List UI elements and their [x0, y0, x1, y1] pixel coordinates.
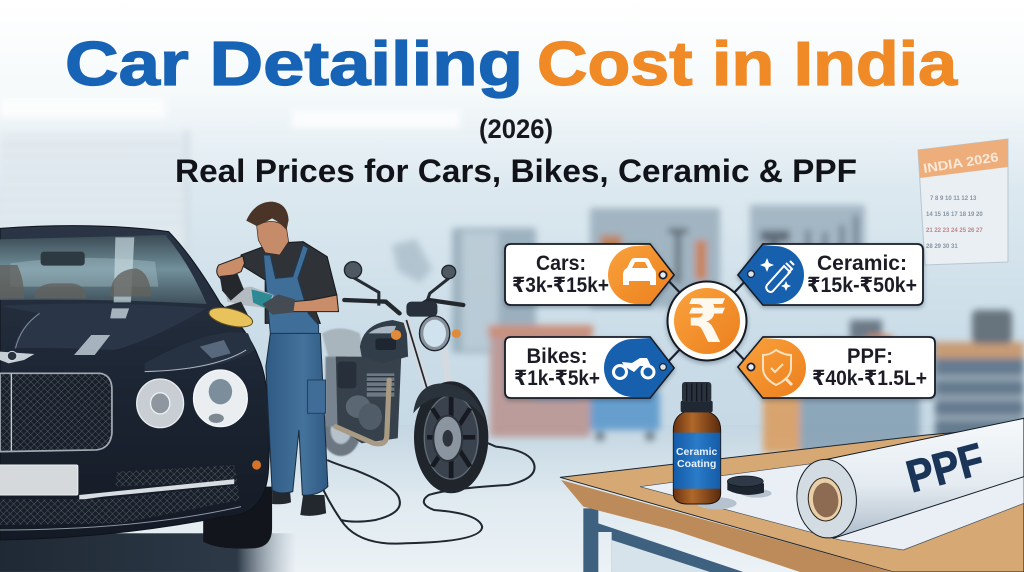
icon: shield: [763, 350, 792, 385]
protective film sheet: [640, 453, 1024, 550]
price tag: ceramic: Ceramic:: [817, 252, 907, 275]
car: [0, 226, 296, 572]
shirt: [241, 242, 337, 323]
license plate: [0, 465, 78, 495]
title: [65, 30, 958, 99]
title: Cost in India: [537, 30, 958, 99]
price tag: ppf: [738, 337, 935, 398]
ceramic coating bottle: Coating: [677, 459, 716, 470]
head: [257, 222, 289, 255]
wall calendar: INDIA 2026: [922, 149, 1000, 176]
icon: motorcycle: [614, 358, 654, 378]
wall calendar: 7 8 9 10 11 12 13: [930, 196, 977, 202]
overall bib and straps: [263, 245, 319, 333]
icon: car: [623, 258, 656, 285]
subtitle: Real Prices for Cars, Bikes, Ceramic & PPF: [175, 153, 857, 189]
rupee medallion: ₹: [686, 288, 728, 355]
power cable: [286, 317, 535, 544]
price tag: bikes: Bikes:: [526, 345, 588, 368]
film roll: [794, 418, 1024, 540]
overalls: [266, 333, 328, 495]
ceramic coating bottle: [673, 382, 721, 504]
gloves: [220, 274, 244, 301]
price tag: bikes: [505, 337, 674, 398]
price tag: cars: Cars:: [536, 252, 586, 275]
boots: [272, 491, 326, 516]
price tag: ceramic: [738, 244, 923, 305]
price tag: cars: ₹3k-₹15k+: [512, 274, 609, 297]
motorcycle: [321, 262, 488, 493]
polisher: [226, 287, 274, 308]
price tag: ppf: ₹40k-₹1.5L+: [812, 367, 927, 390]
ceramic coating bottle: Ceramic: [676, 447, 718, 458]
price tag: ppf: PPF:: [847, 345, 893, 368]
wall calendar: 28 29 30 31: [926, 244, 958, 250]
lower grille: [115, 465, 238, 487]
front grille: [0, 373, 112, 452]
work table: [560, 382, 1024, 572]
detailer with polisher: [207, 202, 339, 516]
wall calendar: [918, 139, 1008, 265]
rupee medallion: [668, 282, 746, 360]
front wheel: [203, 487, 272, 549]
icon: spray bottle: [760, 258, 794, 292]
table top: [560, 427, 1024, 572]
price tag: ceramic: ₹15k-₹50k+: [807, 274, 917, 297]
film roll: PPF: [901, 433, 989, 502]
bottle cap on table: [727, 476, 764, 495]
arms: [217, 256, 245, 280]
year subtitle: (2026): [479, 114, 553, 144]
price tag: cars: [505, 244, 674, 305]
headlights: [137, 370, 247, 428]
price tag: bikes: ₹1k-₹5k+: [514, 367, 600, 390]
wall calendar: 21 22 23 24 25 26 27: [926, 228, 983, 234]
title: Car Detailing: [65, 30, 523, 99]
car shadow on floor: [0, 533, 296, 572]
table legs: [583, 508, 743, 572]
connector lines: [663, 275, 751, 367]
wall calendar: 14 15 16 17 18 19 20: [926, 212, 983, 218]
